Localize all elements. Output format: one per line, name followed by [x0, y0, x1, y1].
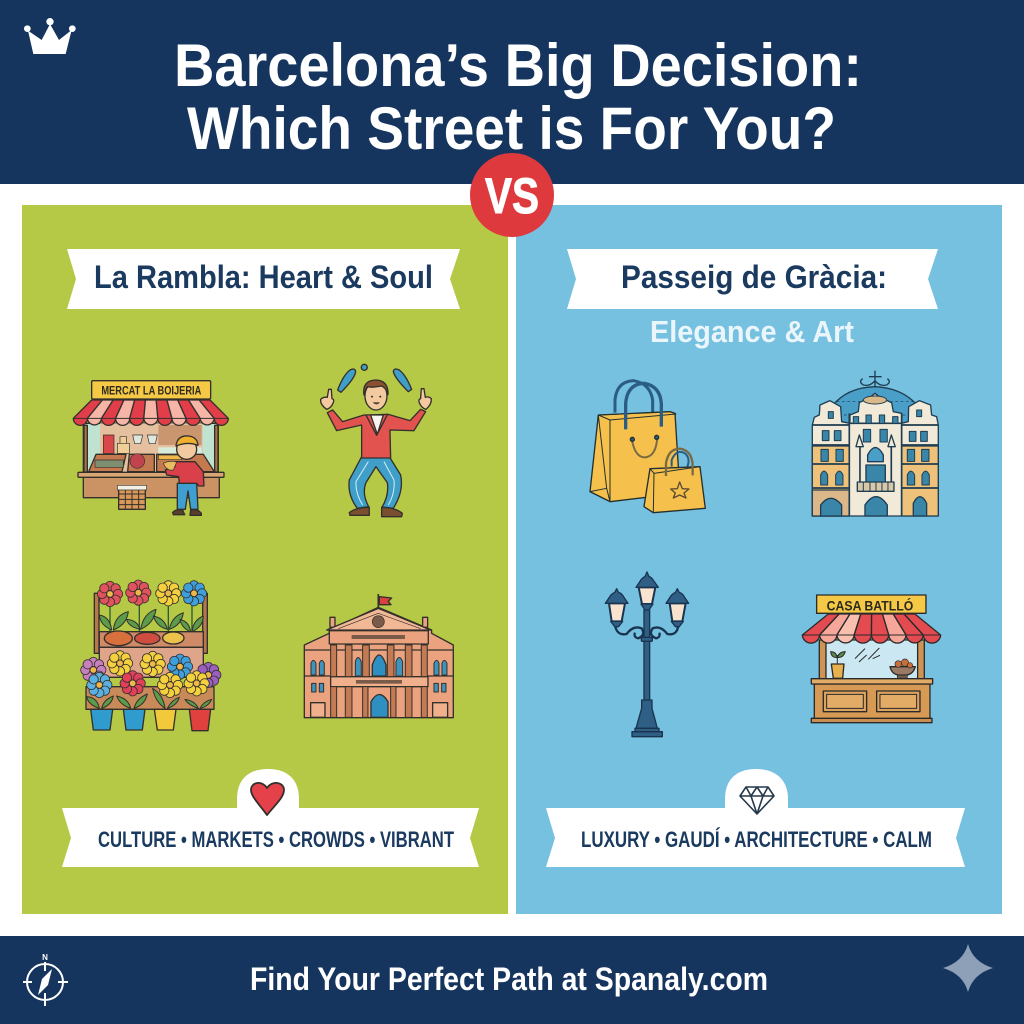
ribbon: Passeig de Gracia heading [567, 249, 938, 309]
ribbon: La Rambla heading: La Rambla: Heart & Soul [94, 259, 433, 295]
subheading: Elegance & Art [650, 314, 854, 349]
ribbon: La Rambla keywords [62, 808, 479, 867]
icon: sparkle star [943, 944, 993, 992]
title: Which Street is For You? [187, 95, 836, 162]
badge tab: heart backing [237, 769, 299, 810]
icon: compass: N [42, 953, 48, 962]
icon: market stall: MERCAT LA BOIJERIA [101, 384, 202, 398]
icon: Casa Batllo stall [802, 595, 941, 723]
icon: diamond [740, 787, 774, 814]
icon: street lamp [605, 572, 689, 737]
icon: Casa Batllo stall: CASA BATLLÓ [827, 596, 913, 613]
ribbon: Passeig keywords: LUXURY • GAUDÍ • ARCHITECTURE • CALM [581, 827, 932, 852]
header band [0, 0, 1024, 184]
ribbon: Passeig de Gracia heading: Passeig de Gràcia: [621, 259, 887, 295]
VS badge: VS [485, 168, 539, 224]
icon: juggler [321, 364, 431, 517]
icon: opera house [304, 594, 453, 718]
icon: flower stand [81, 580, 221, 731]
icon: market stall [73, 381, 228, 515]
badge tab: diamond backing [725, 769, 788, 810]
footer band [0, 936, 1024, 1024]
title [174, 32, 862, 162]
VS badge [470, 153, 554, 237]
icon: heart [251, 783, 284, 815]
icon: Gaudi building [812, 371, 938, 516]
title: Barcelona’s Big Decision: [174, 32, 862, 99]
ribbon: Passeig keywords [546, 808, 965, 867]
ribbon: La Rambla keywords: CULTURE • MARKETS • CROWDS • VIBRANT [98, 827, 454, 852]
panel: Passeig de Gracia [516, 205, 1002, 914]
panel: La Rambla [22, 205, 508, 914]
footer text: Find Your Perfect Path at Spanaly.com [250, 961, 768, 997]
icon: compass [23, 953, 68, 1006]
icon: shopping bags [590, 381, 705, 513]
ribbon: La Rambla heading [67, 249, 460, 309]
icon: crown [24, 18, 76, 54]
